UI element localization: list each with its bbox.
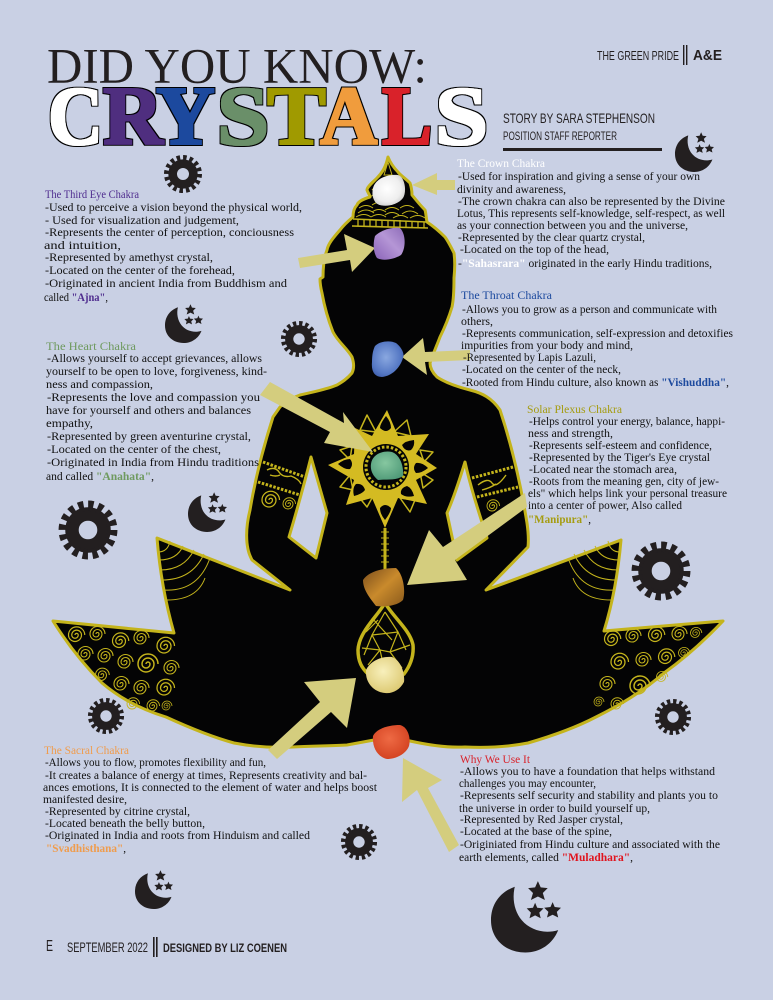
panel: third eye chakra [44,189,302,304]
crystal: red jasper [373,725,410,759]
body text [43,757,378,855]
body text: -Represented by Red Jasper crystal, [460,814,623,826]
body text: -Represented by Lapis Lazuli, [463,352,596,364]
icon: moon 5 [491,881,561,952]
title: crystals [48,70,488,163]
lotus pattern: lower left petal [68,626,179,711]
title: crystals: S [434,70,488,163]
body text: ances emotions, It is connected to the element of water and helps boost [43,782,378,794]
body text: els" which helps link your personal treasure [528,488,727,500]
arrow: solar plexus [407,493,527,585]
body text: -Represents the center of perception, conciousness [45,227,295,239]
title: crystals: Y [156,70,215,163]
body text: -Represented by the Tiger's Eye crystal [529,452,710,464]
panel: crown chakra [457,158,725,270]
heading: The Heart Chakra [46,341,136,353]
body text: -Located on the center of the forehead, [45,265,235,277]
title: crystals: S [216,70,270,163]
body text: yourself to be open to love, forgiveness, kind- [46,366,267,378]
body text: ness and compassion, [46,379,153,391]
body text: and called "Anahata", [46,471,154,483]
body text [461,304,734,389]
body text: -Originiated from Hindu culture and associated with the [460,839,720,851]
title: crystals: L [382,70,432,163]
body text: have for yourself and others and balances [46,405,252,417]
body text [528,416,727,526]
body text: - Used for visualization and judgement, [45,215,239,227]
arrow: sacral [268,678,356,759]
arrow: throat [402,338,470,375]
body text: -The crown chakra can also be represented by the Divine [458,196,725,208]
crystal: green aventurine [371,452,403,480]
body text [457,171,725,270]
byline: STORY BY SARA STEPHENSON [503,110,655,126]
title: crystals: A [320,70,378,163]
body text: -It creates a balance of energy at times, Represents creativity and bal- [45,770,367,782]
heading: Why We Use It [460,754,531,766]
icon: sun 6 [658,702,688,732]
body text: -"Sahasrara" originated in the early Hindu traditions, [458,258,712,270]
crown pattern [352,162,428,228]
pendant chain [381,528,389,573]
body text: ness and strength, [528,428,613,440]
panel: throat chakra [461,290,734,389]
body text: Lotus, This represents self-knowledge, self-respect, as well [457,208,725,220]
icon: sun 7 [344,827,374,857]
crystal: citrine [366,657,404,693]
body text: "Svadhisthana", [46,843,126,855]
icon: moon 2 [165,304,203,343]
body text: impurities from your body and mind, [461,340,633,352]
heading: The Sacral Chakra [44,745,129,757]
body text: -Represents the love and compassion you [47,392,260,404]
body text: divinity and awareness, [457,184,566,196]
body text: into a center of power, Also called [528,500,682,512]
icon: sun 5 [91,701,121,731]
body text: -Used for inspiration and giving a sense of your own [458,171,700,183]
footer [46,937,287,957]
body text: -Represents communication, self-expression and detoxifies [462,328,734,340]
body text [44,202,302,304]
body text: -Allows you to flow, promotes flexibility and fun, [45,757,266,769]
heading: The Throat Chakra [461,290,552,302]
arrow: crown [412,173,455,195]
body text: -Located at the base of the spine, [460,826,612,838]
crystal: clear quartz [372,175,405,206]
body text: -Represents self security and stability and plants you to [460,790,718,802]
title: crystals: T [267,70,326,163]
body text: and intuition, [44,240,121,252]
arm band: left [258,462,305,509]
crystal: tiger's eye [363,568,404,606]
body text: as your connection between you and the universe, [457,220,688,232]
body text: -Roots from the meaning gen, city of jew- [529,476,719,488]
title: crystals: R [103,70,164,163]
arrow: heart [260,382,373,452]
figure: meditating silhouette [43,132,734,957]
body text: -Located near the stomach area, [529,464,677,476]
icon: moon 4 [135,870,173,909]
section tag: THE GREEN PRIDE [597,48,679,63]
arm band: right [472,467,518,511]
body text: called "Ajna", [44,292,108,304]
body text: -Represented by amethyst crystal, [45,252,213,264]
body text: -Located beneath the belly button, [45,818,205,830]
body text: -Originated in India and roots from Hinduism and called [45,830,310,842]
solar medallion [328,410,437,528]
icon: sun 1 [167,158,199,190]
panel: sacral chakra [43,745,378,855]
heading: Solar Plexus Chakra [527,404,622,416]
panel: solar plexus chakra [527,404,727,526]
crystal: amethyst [374,228,405,260]
section tag: A&E [693,47,722,64]
body text: earth elements, called "Muladhara", [459,852,633,864]
body text: the universe in order to build yourself up, [459,803,650,815]
footer: E [46,938,53,955]
body text: -Represented by the clear quartz crystal, [458,232,645,244]
icon: moon 3 [188,492,227,532]
heading: The Third Eye Chakra [45,189,139,201]
body text: -Represents self-esteem and confidence, [529,440,712,452]
icon: sun 4 [637,547,685,595]
body text: -Originated in India from Hindu traditions [47,457,260,469]
body text: challenges you may encounter, [459,778,596,790]
body text [459,766,720,864]
body text [46,353,267,483]
body text: empathy, [46,418,93,430]
crystal: lapis lazuli [372,341,404,377]
arrow: third eye [298,234,375,272]
body text: -Helps control your energy, balance, happi- [529,416,725,428]
footer: SEPTEMBER 2022 [67,940,148,955]
panel: heart chakra [46,341,267,483]
body text: -Allows yourself to accept grievances, allows [47,353,263,365]
title: crystals: C [48,70,103,163]
panel: root chakra [459,754,720,864]
body text: -Located on the center of the neck, [462,364,621,376]
body text: -Located on the center of the chest, [47,444,221,456]
footer: DESIGNED BY LIZ COENEN [163,941,287,955]
icon: sun 2 [284,324,314,354]
arrow: root [402,758,459,852]
icon: sun 3 [64,506,112,554]
body text: -Allows you to have a foundation that helps withstand [460,766,715,778]
body text: manifested desire, [43,794,127,806]
icon: moon 1 [675,132,714,172]
title: did you know: DID YOU KNOW: [47,38,427,94]
body text: others, [461,316,493,328]
heading: The Crown Chakra [457,158,545,170]
body text: -Used to perceive a vision beyond the physical world, [45,202,302,214]
body text: -Located on the top of the head, [460,244,609,256]
pendant teardrop [358,603,413,674]
body text: "Manipura", [528,514,591,526]
body text: -Represented by green aventurine crystal, [47,431,251,443]
body text: -Represented by citrine crystal, [45,806,190,818]
byline: POSITION STAFF REPORTER [503,131,617,143]
body text: -Rooted from Hindu culture, also known as "Vishuddha", [462,377,729,389]
body text: -Originated in ancient India from Buddhism and [45,278,287,290]
body text: -Allows you to grow as a person and communicate with [462,304,717,316]
lotus pattern: lower right petal [594,626,702,709]
byline [503,110,662,151]
lotus pattern: upper petals [158,541,620,600]
